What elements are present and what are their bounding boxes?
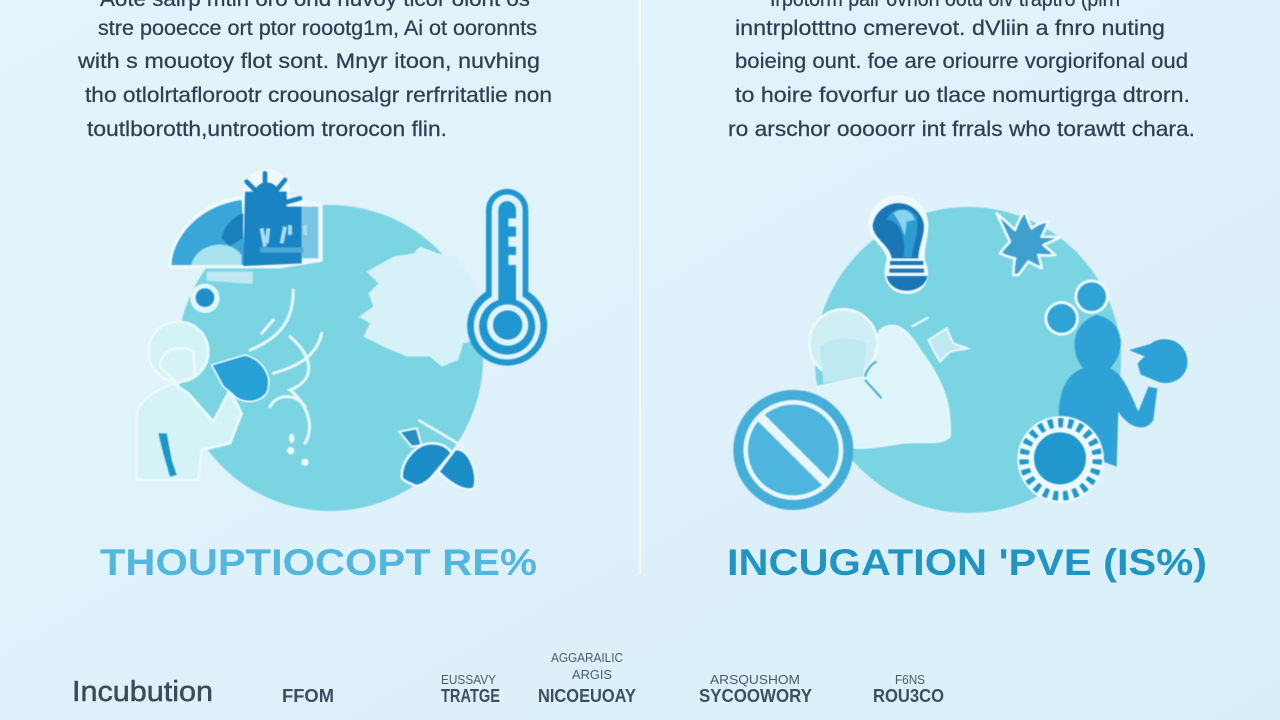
text block: left intro paragraph: stre pooecce ort ptor roootg1m, Ai ot ooronnts [98, 17, 537, 40]
chart: right circle illustration [733, 195, 1188, 513]
text block: right intro paragraph: to hoire fovorfur uo tlace nomurtigrga dtrorn. [735, 84, 1190, 107]
label: AGGARAILIC ARGIS NICOEUOAY: AGGARAILIC [551, 650, 623, 665]
text block: left intro paragraph: toutlborotth,untrootiom trorocon flin. [87, 118, 447, 141]
icon: person with mask [137, 322, 242, 480]
icon: blue lungs and airways [212, 290, 322, 466]
icon: virus [1017, 416, 1104, 503]
label: ARSQUSHOM SYCOOWORY: ARSQUSHOM [710, 672, 800, 687]
label: FFOM: FFOM [282, 686, 334, 706]
label: AGGARAILIC ARGIS NICOEUOAY: ARGIS [572, 667, 612, 682]
text block: right intro paragraph: ro arschor ooooorr int frrals who torawtt chara. [728, 118, 1195, 141]
text block: left intro paragraph [77, 0, 552, 141]
icon: light bulb [868, 195, 928, 294]
label: ARSQUSHOM SYCOOWORY [699, 672, 812, 706]
icon: prohibition sign [733, 390, 853, 510]
label: EUSSAVY TRATGE: TRATGE [441, 686, 500, 706]
text block: right intro paragraph [728, 0, 1195, 141]
icon: thermometer [467, 189, 547, 366]
label: F6NS ROU3CO: F6NS [895, 672, 925, 687]
panel: right column [727, 0, 1207, 583]
label: F6NS ROU3CO: ROU3CO [873, 686, 944, 706]
icon: blue person with bubbles [1044, 279, 1188, 467]
label: EUSSAVY TRATGE: EUSSAVY [441, 672, 496, 687]
label: Incubution: Incubution [72, 676, 213, 708]
label: F6NS ROU3CO [873, 672, 944, 706]
panel: left column [77, 0, 552, 583]
chart: left circle illustration [137, 169, 547, 511]
label: AGGARAILIC ARGIS NICOEUOAY [538, 650, 636, 706]
label: ARSQUSHOM SYCOOWORY: SYCOOWORY [699, 686, 812, 706]
text block: left intro paragraph: with s mouotoy flot sont. Mnyr itoon, nuvhing [77, 50, 540, 73]
icon: blue splat [997, 212, 1060, 275]
icon: white splash [358, 247, 477, 367]
footer: bottom labels [72, 650, 944, 708]
icon: pale person and lung [809, 309, 967, 448]
text block: right intro paragraph: inntrplotttno cmerevot. dVliin a fnro nuting [735, 17, 1165, 40]
heading: right title: INCUGATION 'PVE (IS%) [727, 542, 1207, 583]
icon: cloud and virus document [168, 169, 323, 313]
text block: right intro paragraph: boieing ount. foe are oriourre vorgiorifonal oud [735, 50, 1188, 73]
icon: bottom blue organ [399, 420, 476, 489]
label: AGGARAILIC ARGIS NICOEUOAY: NICOEUOAY [538, 686, 636, 706]
label: EUSSAVY TRATGE [441, 672, 500, 706]
heading: left title: THOUPTIOCOPT RE% [100, 542, 537, 583]
text block: left intro paragraph: tho otlolrtaflorootr croounosalgr rerfrritatlie non [85, 84, 552, 107]
